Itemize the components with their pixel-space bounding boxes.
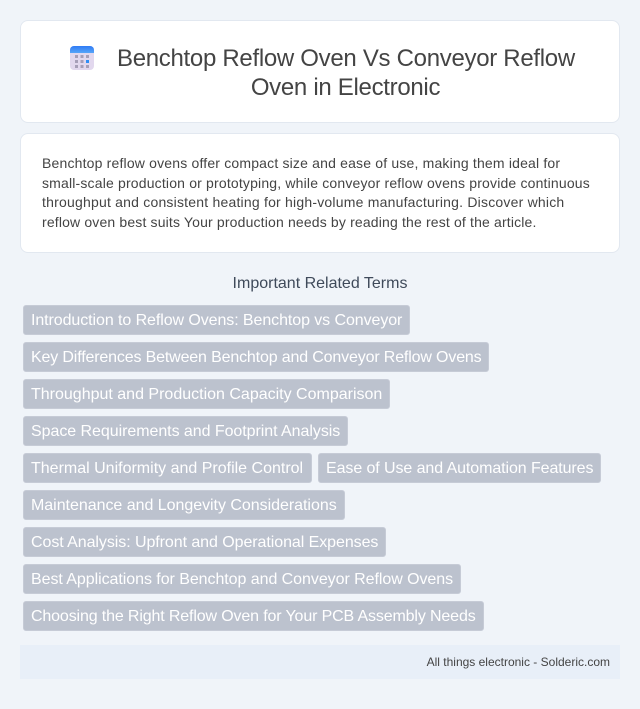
intro text: small-scale production or prototyping, while conveyor reflow ovens provide continuous <box>42 175 590 191</box>
tag: ease of use <box>318 453 601 483</box>
tag: space: Space Requirements and Footprint Analysis <box>31 423 340 440</box>
tag: introduction: Introduction to Reflow Ovens: Benchtop vs Conveyor <box>31 312 402 329</box>
tag: thermal <box>23 453 312 483</box>
intro text: throughput and consistent heating for high-volume manufacturing. Discover which <box>42 194 564 210</box>
header panel <box>20 20 620 123</box>
tag: cost <box>23 527 386 557</box>
intro panel <box>20 133 620 253</box>
footer credit: All things electronic - Solderic.com <box>427 655 610 669</box>
tag list <box>23 305 601 631</box>
icon: calendar <box>70 46 94 70</box>
tag: choosing: Choosing the Right Reflow Oven for Your PCB Assembly Needs <box>31 608 476 625</box>
intro text: Benchtop reflow ovens offer compact size and ease of use, making them ideal for <box>42 155 560 171</box>
title: Benchtop Reflow Oven Vs Conveyor Reflow <box>117 45 575 72</box>
intro text <box>42 155 590 230</box>
tag: introduction <box>23 305 410 335</box>
tag: throughput <box>23 379 390 409</box>
section heading: Important Related Terms <box>233 275 407 292</box>
tag: throughput: Throughput and Production Capacity Comparison <box>31 386 382 403</box>
title: Oven in Electronic <box>251 74 440 101</box>
tag: maintenance: Maintenance and Longevity Considerations <box>31 497 337 514</box>
tag: applications: Best Applications for Benchtop and Conveyor Reflow Ovens <box>31 571 453 588</box>
tag: choosing <box>23 601 484 631</box>
tag: ease of use: Ease of Use and Automation Features <box>326 460 593 477</box>
footer <box>20 645 620 679</box>
tag: space <box>23 416 348 446</box>
tag: cost: Cost Analysis: Upfront and Operational Expenses <box>31 534 378 551</box>
title <box>117 45 576 101</box>
tag: maintenance <box>23 490 345 520</box>
intro text: reflow oven best suits Your production needs by reading the rest of the article. <box>42 214 537 230</box>
tag: key differences <box>23 342 489 372</box>
tag: thermal: Thermal Uniformity and Profile Control <box>31 460 303 477</box>
tag: key differences: Key Differences Between Benchtop and Conveyor Reflow Ovens <box>31 349 482 366</box>
tag: applications <box>23 564 461 594</box>
